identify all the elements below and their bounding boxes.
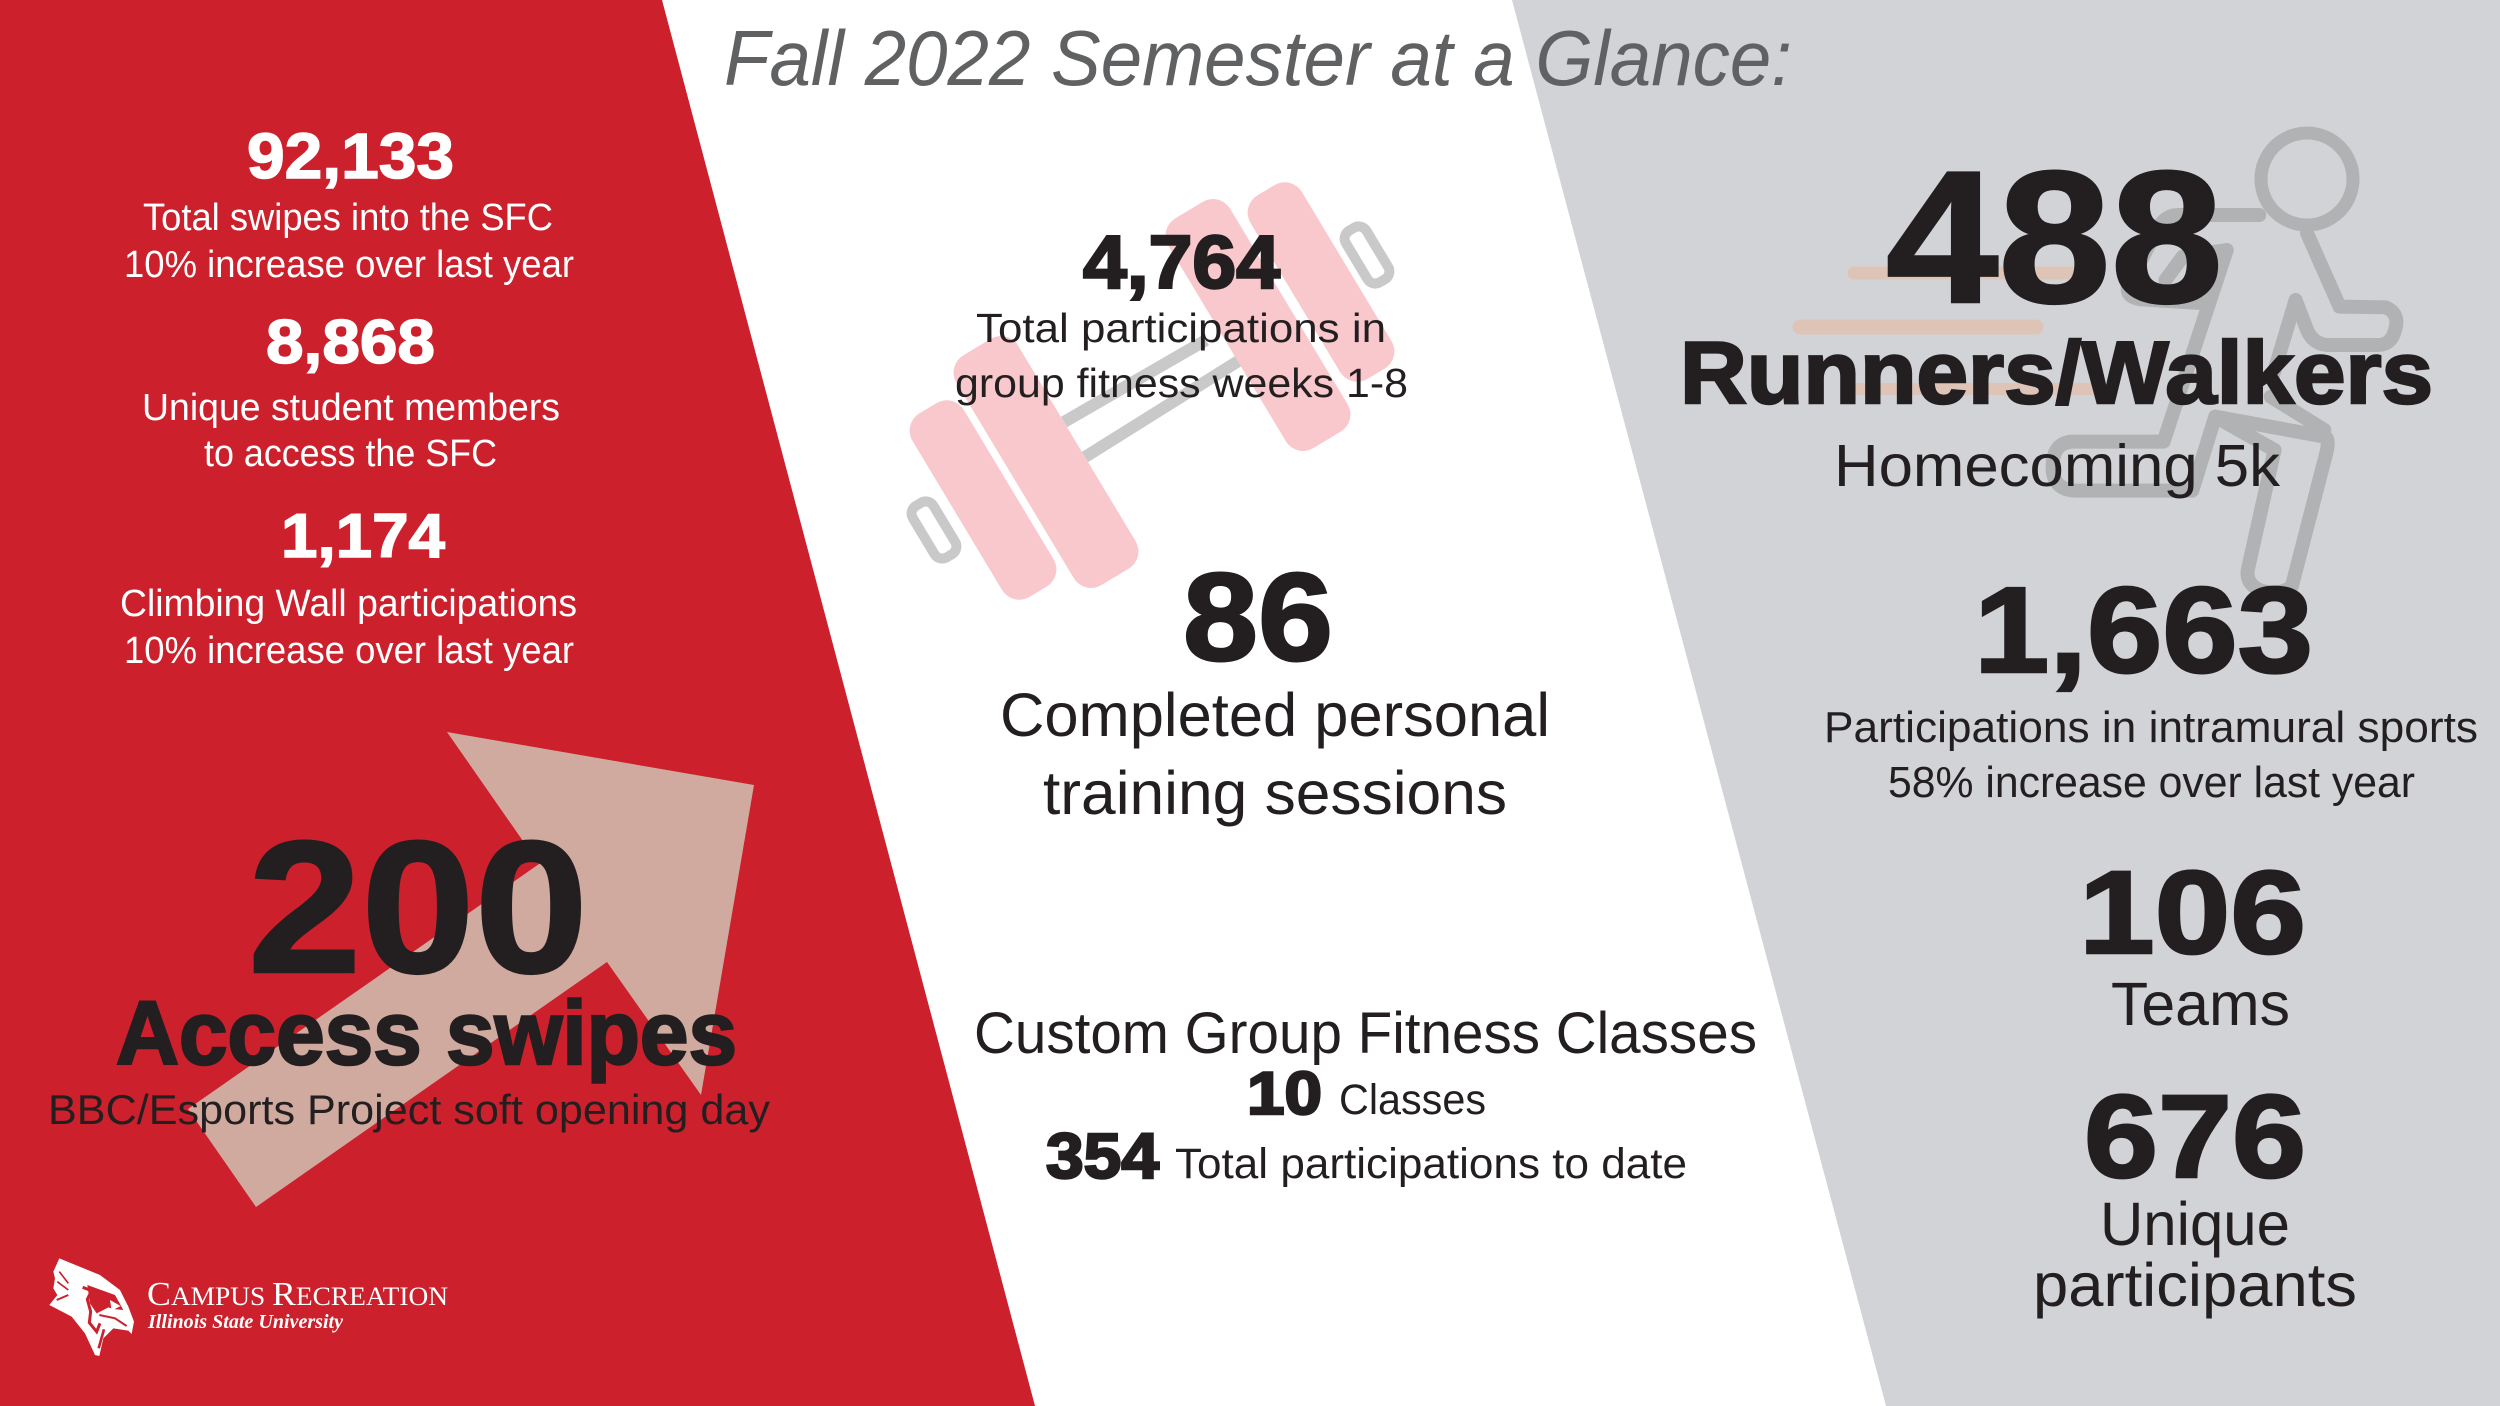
stat: intramural sports: 1,663 — [1974, 562, 2313, 698]
stat: teams: Teams — [2111, 970, 2290, 1038]
stat: personal training: Completed personal — [1000, 681, 1550, 749]
stat: custom group fitness: Classes — [1339, 1076, 1486, 1124]
stat: climbing wall: 10% increase over last year — [124, 630, 574, 672]
logo subtitle: Illinois State University — [147, 1311, 343, 1333]
stat: unique participants: 676 — [2084, 1071, 2306, 1203]
stat: intramural sports: Participations in intramural sports — [1824, 703, 2478, 752]
stat: access swipes: 200 — [248, 802, 588, 1012]
stat: unique participants — [2033, 1071, 2357, 1319]
title: Fall 2022 Semester at a Glance: — [724, 14, 1792, 102]
panel: red left background — [0, 0, 1035, 1406]
stat: custom group fitness: 10 — [1247, 1060, 1322, 1127]
stat: group fitness participations: 4,764 — [1083, 220, 1280, 304]
stat: personal training — [1000, 548, 1550, 827]
stat: climbing wall — [120, 502, 577, 672]
stat: access swipes: BBC/Esports Project soft opening day — [48, 1086, 770, 1133]
stat: custom group fitness — [974, 1001, 1757, 1192]
logo: Campus Recreation — [49, 1258, 448, 1356]
stat: access swipes — [48, 802, 770, 1133]
stat: personal training: 86 — [1183, 548, 1333, 687]
icon: upward arrow — [188, 732, 754, 1207]
stat: unique student members — [142, 308, 560, 475]
stat: custom group fitness: Custom Group Fitness Classes — [974, 1001, 1757, 1066]
stat: unique participants: Unique — [2100, 1190, 2290, 1258]
stat: unique student members: to access the SFC — [204, 433, 497, 475]
stat: custom group fitness: 354 — [1046, 1120, 1159, 1192]
stat: intramural sports: 58% increase over last year — [1888, 758, 2415, 807]
stat: group fitness participations: group fitness weeks 1-8 — [955, 360, 1408, 406]
stat: total swipes — [124, 120, 574, 286]
panel: facility statistics — [120, 120, 577, 672]
stat: homecoming 5k: Runners/Walkers — [1680, 323, 2433, 422]
stat: personal training: training sessions — [1043, 759, 1507, 827]
stat: total swipes: 10% increase over last year — [124, 244, 574, 286]
stat: teams — [2079, 847, 2306, 1038]
icon: runner — [1800, 133, 2396, 593]
stat: homecoming 5k: Homecoming 5k — [1834, 433, 2281, 499]
icon: cardinal head — [49, 1258, 134, 1356]
stat: teams: 106 — [2079, 847, 2306, 979]
stat: custom group fitness: Total participations to date — [1175, 1140, 1687, 1188]
logo wordmark: CAMPUS RECREATION — [147, 1276, 448, 1313]
stat: group fitness participations: Total participations in — [976, 305, 1386, 351]
panel: gray right background — [1512, 0, 2500, 1406]
stat: homecoming 5k: 488 — [1886, 132, 2223, 342]
stat: unique student members: 8,868 — [266, 308, 435, 377]
stat: intramural sports — [1824, 562, 2478, 807]
stat: group fitness participations — [955, 220, 1408, 406]
stat: climbing wall: Climbing Wall participations — [120, 583, 577, 625]
stat: total swipes: 92,133 — [247, 120, 454, 192]
stat: homecoming 5k — [1680, 132, 2433, 499]
stat: total swipes: Total swipes into the SFC — [143, 197, 553, 239]
stat: unique student members: Unique student members — [142, 387, 560, 429]
icon: dumbbell — [902, 175, 1402, 607]
stat: unique participants: participants — [2033, 1251, 2357, 1319]
stat: access swipes: Access swipes — [116, 984, 737, 1084]
stat: climbing wall: 1,174 — [281, 502, 446, 571]
